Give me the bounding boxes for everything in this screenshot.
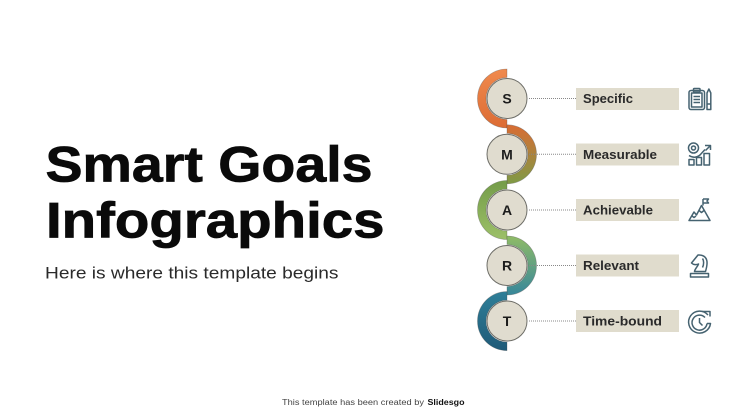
step A: Achievable	[583, 204, 653, 218]
subtitle: Here is where this template begins	[45, 264, 338, 282]
footer credit: Slidesgo	[428, 398, 465, 407]
step R: Relevant	[583, 259, 640, 273]
step S: S	[502, 90, 512, 106]
icon: coin and rising bar chart	[688, 143, 710, 165]
arc: M orange to olive	[507, 125, 536, 184]
arc: A green	[478, 180, 507, 240]
icon: chess knight	[690, 255, 708, 277]
step R: R	[502, 258, 512, 274]
step T	[487, 301, 679, 341]
arc: T teal to navy	[478, 292, 507, 351]
title: Infographics	[46, 192, 384, 248]
step T: Time-bound	[583, 314, 662, 328]
step T: T	[503, 313, 512, 329]
footer credit: This template has been created by	[282, 398, 424, 407]
step A: A	[502, 202, 512, 218]
icon: clock with circular arrow	[689, 311, 710, 333]
icon: mountain with flag	[689, 199, 710, 220]
step R	[487, 246, 679, 286]
step M: Measurable	[583, 148, 657, 162]
step S	[487, 78, 679, 118]
footer credit	[282, 398, 465, 407]
title: Smart Goals	[46, 136, 372, 192]
step M: M	[501, 146, 513, 162]
connected arc chain	[478, 69, 536, 351]
title	[46, 136, 384, 248]
step S: Specific	[583, 92, 633, 106]
icon: clipboard and pencil	[689, 88, 711, 110]
arc: S orange	[478, 69, 507, 128]
arc: R green to teal	[507, 236, 536, 295]
step A	[487, 190, 679, 230]
step M	[487, 134, 679, 174]
